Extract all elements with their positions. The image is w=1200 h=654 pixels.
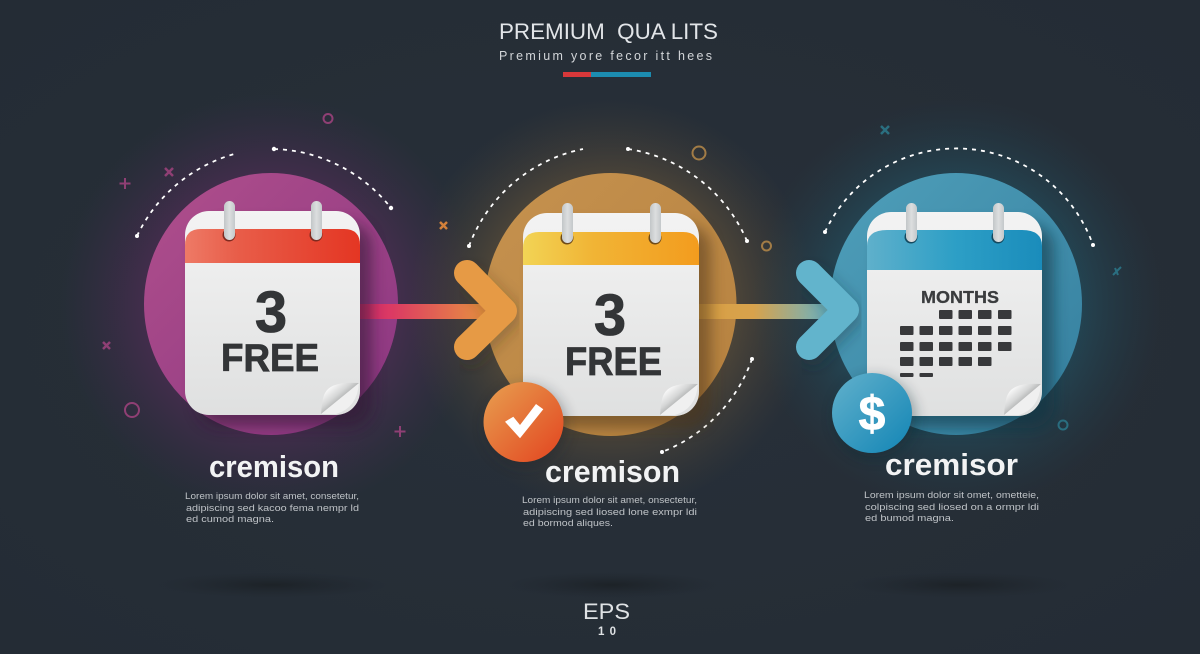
decorations: magenta group xyxy=(103,114,406,437)
page curl xyxy=(321,383,359,414)
glow: blue xyxy=(751,99,1161,509)
description: step 2 xyxy=(522,495,697,528)
calendar header xyxy=(867,230,1042,270)
description: step 2: adipiscing sed liosed lone exmpr ldi xyxy=(523,507,697,517)
floor shadow 1 xyxy=(157,572,387,598)
calendar page xyxy=(185,211,360,415)
description: step 2: Lorem ipsum dolor sit amet, onsectetur, xyxy=(522,495,697,505)
label: step 2: cremison xyxy=(545,454,680,489)
dotted arcs: step 1 xyxy=(135,147,393,238)
footer: EPS 10 xyxy=(583,599,630,638)
months label: MONTHS xyxy=(921,287,999,307)
calendar: step 1 xyxy=(185,201,372,427)
calendar word: FREE xyxy=(565,340,662,384)
circle: step 1 xyxy=(144,173,398,435)
label: step 1: cremison xyxy=(209,449,339,484)
footer: EPS 10: 10 xyxy=(598,626,616,638)
description: step 3 xyxy=(864,490,1039,523)
subtitle: Premium yore fecor itt hees xyxy=(499,49,712,63)
floor shadow 3 xyxy=(850,572,1070,598)
description: step 1: adipiscing sed kacoo fema nempr ld xyxy=(186,503,359,513)
decorations: blue group xyxy=(881,126,1121,430)
page curl xyxy=(660,384,698,415)
calendar number: 3 xyxy=(255,280,287,345)
circle: step 2 xyxy=(484,173,736,436)
arrow: step 2 to step 3 xyxy=(699,273,850,353)
glow: magenta xyxy=(61,94,481,514)
description: step 3: ed bumod magna. xyxy=(865,513,954,523)
binding rings xyxy=(560,203,662,244)
description: step 3: colpiscing sed liosed on a ormpr ldi xyxy=(865,502,1039,512)
badge: dollar: $ xyxy=(859,388,886,441)
calendar word: FREE xyxy=(221,337,319,380)
calendar page xyxy=(523,213,699,416)
description: step 2: ed bormod aliques. xyxy=(523,518,613,528)
title: PREMIUM QUA LITS xyxy=(499,19,718,44)
decorations: amber group xyxy=(440,146,771,250)
badge: dollar xyxy=(832,373,915,457)
binding rings xyxy=(222,201,322,242)
binding rings xyxy=(904,203,1004,244)
badge: check xyxy=(484,382,566,466)
arrow: step 1 to step 2 xyxy=(360,273,508,353)
dotted arcs: step 2 xyxy=(467,147,754,454)
label: step 3: cremisor xyxy=(885,447,1018,482)
month grid xyxy=(900,310,1012,377)
accent bar xyxy=(563,72,651,77)
description: step 1: ed cumod magna. xyxy=(186,514,274,524)
circle: step 3 xyxy=(830,173,1082,435)
title block xyxy=(499,19,718,77)
description: step 3: Lorem ipsum dolor sit omet, ometteie, xyxy=(864,490,1039,500)
calendar page xyxy=(867,212,1042,416)
calendar number: 3 xyxy=(594,283,626,348)
calendar header xyxy=(523,232,699,265)
floor shadow 2 xyxy=(507,572,717,598)
footer: EPS 10: EPS xyxy=(583,599,630,624)
page curl xyxy=(1004,384,1041,415)
glow: amber xyxy=(406,99,816,509)
description: step 1: Lorem ipsum dolor sit amet, consetetur, xyxy=(185,491,359,501)
calendar: step 2 xyxy=(523,203,711,428)
calendar header xyxy=(185,229,360,263)
calendar: step 3 xyxy=(867,203,1054,428)
dotted arcs: step 3 xyxy=(823,148,1095,247)
description: step 1 xyxy=(185,491,359,524)
